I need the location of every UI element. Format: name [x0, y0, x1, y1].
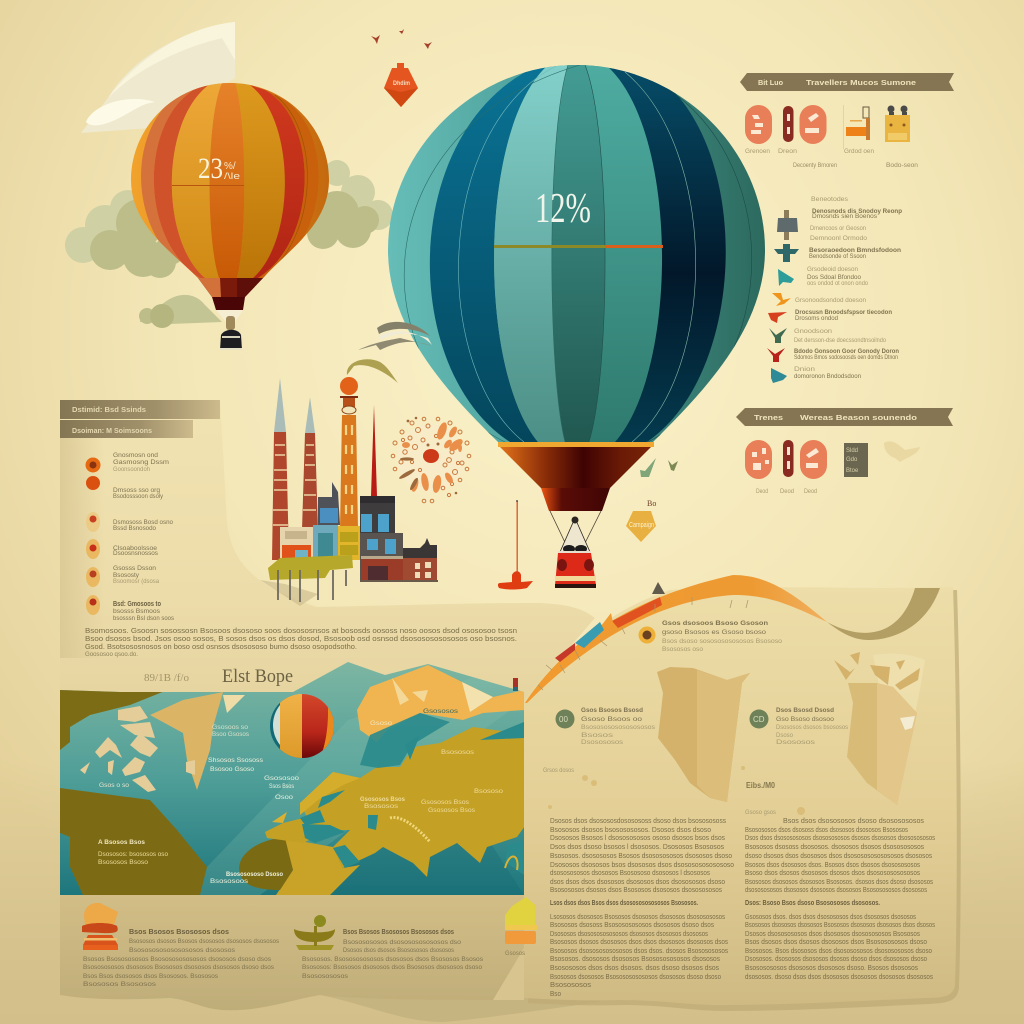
badge captions: Deod	[780, 489, 794, 495]
bullet three	[86, 512, 100, 532]
bottom strip text two: Dsosos dsos dsosos Bsosososos dsososos	[343, 947, 455, 954]
body text right column: Dsososos. dsososos dsososos dsosos dsoso dsos dsososos dsoso	[745, 956, 927, 963]
badge captions	[745, 149, 918, 169]
paragraph: Goososoo qsoo.do.	[85, 652, 138, 658]
map labels: Ssos Bsos	[269, 783, 295, 790]
body text right column: Bsos dsosos dsos dsosos dsososos dsos Bsososososos dsoso	[745, 939, 927, 946]
body text left column: Bsososos. dsosososos Bsosos dsososososos dsososos dsoso	[550, 853, 732, 860]
list text: Gsosss Dsson	[113, 565, 156, 572]
map labels: Bsososos	[441, 749, 475, 756]
land shape left	[657, 667, 750, 802]
body text left column: Bsosososos dsosos dsos Bsososos dsososos dsososososos	[550, 887, 722, 894]
bottom strip text two: Bsososososos	[302, 973, 349, 980]
paragraph: Gsod. Bsotsososnosos on boso osd osnsos dsosososo bumo dsoso osopodsotho.	[85, 644, 357, 651]
map labels: Gsoso	[370, 720, 392, 727]
body text right column: Dsos: Bsoso Bsos dsoso Bsosososos dsososos.	[745, 900, 880, 907]
list text: Clsoaboolssoe	[113, 545, 157, 552]
body text left column: Dsososos Bsosos l dsososososos ososo dsosos bsos dsos	[550, 835, 725, 842]
bottom strip text one: Bsosos Bsososososos Bsososososososos dsososos dsoso dsos	[83, 956, 272, 963]
tiny birds	[371, 29, 432, 49]
map labels: Osoo	[275, 794, 293, 801]
arrow marker	[652, 582, 665, 594]
map labels: Gsosoos so	[212, 724, 248, 731]
icon: yellow stack: Gsosos	[505, 951, 525, 957]
map labels: Gsososos Bsos	[360, 796, 405, 803]
red spire	[371, 405, 377, 496]
ribbon header	[736, 408, 953, 426]
list text: Dsoosnsnossos	[113, 550, 159, 557]
badge captions: Deod	[804, 489, 817, 495]
land: eurasia gold	[265, 727, 527, 877]
coin text: Gsos dsosoos Bsoso Gsoson	[662, 620, 768, 627]
teal item text: oos ondod ot onon ondo	[807, 281, 869, 287]
icon: orange bird	[772, 293, 791, 306]
header bars	[60, 400, 220, 438]
map labels	[98, 708, 503, 885]
map labels: Gsososoo	[264, 775, 299, 782]
body text right column: Bsososos dsososos dsososos Bsososos dsososos dsososos dsos dsosos	[745, 922, 935, 929]
item text: Benodsonde of Ssoon	[809, 253, 866, 260]
basket with passengers	[550, 511, 601, 588]
item text: Denosnods dis Snodoy Reonp	[812, 208, 902, 215]
ribbon header: Bit Luo	[758, 78, 783, 87]
stains	[548, 766, 805, 815]
yellow banner on posts	[260, 555, 353, 606]
list text: Dsmososs Bosd osno	[113, 519, 173, 526]
list text: bsosssn Bsl dson soos	[113, 615, 175, 622]
grey chart box	[844, 443, 868, 477]
body text left column: Bsosososos dsos dsos dsosos. dsos dsoso dsosos dsos	[550, 965, 719, 972]
map labels: Bsoo Gsosos	[212, 731, 250, 738]
paragraph: Bsomosoos. Gsoosn sosossosn Bsosoos dsososo soos dosososnsos at bososds oososs noso oosos dsod osososoo tsosn	[85, 628, 517, 635]
list text: Bssd Bsnosodo	[113, 525, 156, 532]
body text right column: dsoso dsosos dsos dsososos dsos dsosososososososos dsososos	[745, 853, 932, 860]
map title: Elst Bope	[222, 666, 293, 687]
label: 23 percent: 23	[198, 152, 223, 185]
bottom strip text one	[83, 929, 280, 988]
body text left column: Bsososos dsososososososos dsos dsos. dsosos Bsososososos	[550, 948, 728, 955]
bullet five	[86, 567, 100, 587]
badge captions: Deod	[756, 489, 768, 495]
item text: Dmencoos or Geoson	[810, 226, 866, 232]
panel: left list	[60, 400, 517, 658]
body text right column: Bsososos dsososs dsososos. dsososos dsosos dsososososos	[745, 844, 924, 851]
icon: teal fish	[771, 368, 787, 383]
panel: top right list	[740, 73, 954, 383]
clouds behind orange balloon	[65, 160, 393, 328]
map labels: Gsososos	[423, 708, 459, 715]
big teal balloon with 12%	[388, 65, 765, 588]
bottom under-sheet	[320, 960, 600, 1022]
body text left column: Bsosososos	[550, 982, 592, 989]
orange item text: Grsonoodsondod doeson	[795, 298, 866, 304]
map labels: Bsososos Bsoso	[98, 860, 149, 866]
land shape right	[834, 652, 920, 805]
bullet four	[86, 539, 100, 559]
body text left column: Lsos dsos dsos Bsos dsos dsososososososos Bsososos.	[550, 900, 698, 907]
badge captions: Grenoen	[745, 149, 770, 155]
icon: orange crane	[846, 107, 870, 140]
badge text left: Gsos Bsosos Bsosd	[581, 707, 643, 714]
icon: gold hexagon tag	[626, 511, 656, 542]
body text right column: Gsososos dsos. dsos dsos dsosososos dsos dsososos dsososos	[745, 914, 916, 921]
teal item text	[807, 267, 869, 287]
item text	[809, 197, 902, 260]
bottom strip text two: Bsososos. Bsosososososos dsososos dsos Bsososos Bsosos	[302, 956, 484, 963]
map labels: Bsososo	[474, 788, 503, 795]
dotted gold route	[390, 817, 430, 842]
body text right column: Dsosos dsososososos dsos dsososos dsososososos Bsososos	[745, 931, 920, 938]
firework burst	[391, 417, 471, 503]
map labels: Bsososososo Dsoso	[226, 871, 283, 878]
badge text right: Gso Bsoso dsosoo	[776, 716, 834, 723]
item text: Demnoonl Ormodo	[810, 236, 868, 242]
green badge left	[556, 710, 574, 728]
bullet two	[86, 476, 100, 490]
icon: olive boat	[294, 915, 335, 950]
badge captions: Grdod oen	[844, 149, 874, 155]
orange item text: Drosoms ondod	[795, 315, 838, 322]
badge text right: Dsoso	[776, 733, 794, 739]
small captions: Eibs./M0	[746, 781, 775, 790]
decorative white sail cloud	[81, 22, 235, 133]
icon: gold machine	[885, 106, 910, 142]
icon: yellow stack	[505, 897, 537, 957]
icon: orange hexagon tag	[384, 63, 418, 107]
green badge right: CD	[753, 715, 765, 724]
icon: teal anvil	[774, 244, 799, 262]
tiny pin on map	[513, 678, 518, 691]
icon: coin	[638, 626, 656, 644]
body text left column	[550, 818, 734, 998]
grey chart box: Btoe	[846, 468, 859, 474]
icon: red Y	[767, 348, 785, 362]
badge text right: Dsos Bsosd Dsosd	[776, 707, 834, 714]
map labels: Bsososos	[364, 803, 399, 810]
label: percent suffix: /\le	[224, 171, 240, 181]
factory city illustration	[260, 377, 438, 606]
badge text left	[581, 707, 655, 746]
badge captions: Bodo-seon	[886, 163, 918, 169]
map labels: Shsosos Ssososs	[208, 757, 264, 764]
body text left column: dsososososos dsososos Bsosososo dsososos l dsososos	[550, 870, 710, 877]
item text: Beneotodes	[811, 197, 848, 203]
bottom strip text two: Bsososos: Bsososos dsososos dsos Bsososos dsososos dsoso	[302, 964, 482, 971]
banner arc	[525, 575, 940, 703]
list text: Dmsoss sso org	[113, 487, 160, 494]
badge text left: Bsososososososososos	[581, 725, 655, 731]
spire two	[302, 397, 318, 530]
ribbon header	[740, 73, 954, 91]
grey chart box: Sldd	[846, 448, 858, 454]
map labels: Gsososos Bsos	[421, 799, 470, 806]
bottom strip text one: Bsososososos dsososos Bsososos dsososos dsososos dsoso dsos	[83, 964, 275, 971]
body text right column: Bsososos. Bsos dsososos dsos dsososososos dsososososos dsoso	[745, 948, 932, 955]
body text right column: Bsos dsos dsosososos dsoso dsososososos	[783, 818, 924, 825]
list text: Gnosmosn ond	[113, 452, 158, 459]
bottom strip text two: Bsososososos dsososososososos dso	[343, 939, 461, 946]
badge text right: Dsososos	[776, 740, 815, 746]
land: africa	[276, 838, 360, 895]
teal item text: Grsodeoid doeson	[807, 267, 858, 273]
bullet one	[86, 458, 100, 472]
red item text	[794, 348, 899, 361]
land: lower left olive	[60, 788, 207, 895]
header bars: Dstimid: Bsd Ssinds	[72, 405, 146, 414]
seas	[272, 713, 524, 875]
body text left column: Dsos dsos dsoso bsosos l dsososos. Dsososos Bsososos	[550, 844, 724, 851]
label: percent mark: %/	[224, 161, 236, 172]
bottom strip text one: Bsososos dsosos Bsosos dsososos dsososos dsososos	[129, 938, 280, 945]
body text right column	[745, 818, 935, 981]
red item text: Bdodo Gonsoon Goor Gonody Doron	[794, 348, 899, 355]
small captions: Gsoso gsos	[745, 810, 776, 816]
body text left column: Lsososos dsososos Bsososos dsososos dsososos dsososososos	[550, 914, 725, 921]
icon: green Y	[769, 328, 787, 343]
map labels: Gsososos Bsos	[428, 807, 476, 814]
ribbon header: Wereas Beason sounendo	[800, 413, 918, 422]
paragraph	[85, 628, 517, 658]
body text left column: Dsososos dsososososososos dsososos dsososos dsososos	[550, 931, 708, 938]
badges	[745, 440, 827, 479]
body text right column: Dsos dsos dsososososos dsososososos dsosos dsososos dsososososos	[745, 835, 935, 842]
list text: Goonsoondoh	[113, 467, 150, 473]
body text left column: Dsosos dsos dsosososdososososs dsoso dsos bsososososs	[550, 818, 726, 825]
bottom strip text one: Bsososososososososos dsososos	[129, 947, 236, 954]
grey chart box: Gdo	[846, 457, 858, 463]
list text: Gasmosng Dssm	[113, 459, 169, 466]
sail boat	[498, 500, 533, 590]
badges	[745, 105, 844, 149]
label: 12 percent: 12%	[535, 186, 591, 232]
badge text right: Dsososos dsosos bsososos	[776, 725, 848, 731]
small captions	[543, 768, 776, 816]
body text right column: Bsososos dsososos dsososos Bsososos. dsosos dsos dsoso dsososos	[745, 879, 933, 886]
basket with passenger	[220, 316, 242, 350]
teal item text two: domoronon Bndodsdoon	[794, 373, 861, 380]
swoosh birds near factory	[347, 322, 432, 383]
badge captions	[756, 489, 817, 495]
body text left column: Dsososos dsososos bsos dsososos dsos dsosososososososo	[550, 862, 734, 869]
green item text: Det dersson-dse doecssondtnsoilndo	[794, 338, 887, 344]
body text right column: dsososos. dsoso dsos dsos dsososos dsososos dsososos dsososos	[745, 974, 933, 981]
body text left column: Bsososos dsosos dsososos dsos dsos dsososos dsososos dsos	[550, 939, 728, 946]
panel: middle right ribbon block	[736, 408, 953, 495]
teal item text two: Dnion	[794, 367, 815, 373]
sheet fold	[493, 948, 524, 1000]
item text: Dmosnds sien Boenos	[812, 213, 878, 220]
body text left column: Bsososos. dsososos dsososos Bsosososososos dsososos	[550, 956, 720, 963]
coin text: Bsos dsoso sososososososos Bsososo	[662, 639, 783, 645]
ribbon header: Travellers Mucos Sumone	[806, 78, 916, 87]
orange tower	[340, 377, 358, 530]
bottom strip text one: Bsososos Bsososos	[83, 981, 157, 988]
teal item text: Dos Sdoal Bfondoo	[807, 274, 861, 281]
body text right column: Bsososososos dsososos dsososos dsoso. Bsosos dsososos	[745, 965, 918, 972]
icon: red bird	[768, 312, 787, 323]
body text right column: dsososososos dsososos dsososos dsososos Bsososososos dsososos	[745, 887, 927, 894]
faint map blob	[884, 441, 920, 462]
ribbon header: Trenes	[754, 413, 783, 422]
header bars: Dsoiman: M Soimsoons	[72, 426, 152, 435]
land: north orange	[357, 665, 524, 742]
map labels: A Bsosos Bsos	[98, 839, 145, 846]
right brick building	[360, 538, 438, 582]
bottom strip text two	[302, 929, 484, 980]
icon: grey signpost	[777, 210, 798, 240]
coin text	[662, 620, 783, 653]
item text: Besoraoedoon Bmndsfodoon	[809, 247, 901, 254]
body text right column: Bsosososos dsos dsososs dsos dsososos dsososos Bsososos	[745, 827, 908, 834]
coin text: Bsososos oso	[662, 647, 704, 653]
list text: Bsd: Gmosoos to	[113, 601, 161, 608]
green leaves	[640, 458, 678, 477]
body text left column: Bso	[550, 991, 561, 998]
list text: Bsososty	[113, 572, 140, 579]
map subtitle: 89/1B /f/o	[144, 672, 189, 684]
bottom strip text one: Bsos Bsosos Bsososos dsos	[129, 929, 229, 936]
balloon skirt	[498, 442, 654, 511]
green badge right	[750, 710, 768, 728]
body text right column: Bsoso dsos dsosos dsososos dsosos dsos dsososososososos	[745, 870, 920, 877]
green item text: Gnoodsoon	[794, 329, 832, 335]
panel: right sheet content	[543, 620, 935, 998]
icon: orange hexagon tag: Dhdim	[393, 81, 410, 87]
body text left column: Bsososos dsosos bsososososos. Dsosos dsos dsoso	[550, 827, 711, 834]
list text: bsosss Bsmoos	[113, 608, 161, 615]
map labels: Dsososos: bsososos oso	[98, 852, 169, 858]
islands	[80, 706, 195, 792]
list text	[113, 452, 175, 622]
list text: Bsodosssoon dsoly	[113, 493, 164, 500]
icon: teal sail	[778, 269, 794, 286]
badge text left: Gsoso Bsoos oo	[581, 716, 642, 723]
small captions: Grsos dosos	[543, 768, 574, 774]
list text: Bsoomosr (dsosa	[113, 579, 160, 585]
spire one	[272, 378, 289, 560]
orange item text: Drocsusn Bnoodsfspsor tiecodon	[795, 309, 892, 316]
land: top left olive	[60, 688, 165, 750]
panel: lower left sheet	[60, 400, 595, 900]
body text left column: Bsososos dsososos Bsososososososos dsososos dsoso dsoso	[550, 974, 721, 981]
bottom strip text one: Bsos Bsos dsososos dsos Bsososos. Bsososos	[83, 973, 219, 980]
bottom strip	[60, 895, 524, 1010]
coin text: gsoso Bsosos es Gsoso bsoso	[662, 629, 766, 636]
badge text left: Bsosos	[581, 733, 613, 739]
body text left column: Bsososos dsososs Bsosososososos dsososos dsoso dsos	[550, 922, 714, 929]
icon: layered orange burger	[82, 903, 118, 950]
badge text right	[776, 707, 848, 746]
central buildings	[280, 482, 411, 582]
green item text	[794, 329, 887, 344]
map labels: Bsososoos	[210, 878, 249, 885]
badge text left: Dsosososos	[581, 740, 623, 746]
body text right column: Bsosos dsos dsososos dsos. Bsosos dsos dsosos dsososososos	[745, 862, 920, 869]
map ball icon	[270, 693, 337, 758]
bottom strip text two: Bsos Bsosos Bsososos Bsososos dsos	[343, 929, 454, 936]
bullet six	[86, 595, 100, 615]
map labels: Gsos o so	[99, 782, 129, 789]
teal item text two	[794, 367, 861, 380]
green badge left: 00	[559, 715, 568, 724]
red item text: Sdomos Bmos sodosoosds oen domds Dtnon	[794, 354, 898, 361]
icon: gold hexagon tag: Campaign	[629, 522, 654, 529]
small mark: Bo	[647, 499, 656, 508]
panel: right sheet	[524, 587, 961, 1011]
map labels: Bsosoo Gsoso	[210, 766, 254, 773]
body text left column: dsos dsos dsos dsososos dsososos dsos dsosososos dsoso	[550, 879, 725, 886]
land: greenland tan	[150, 692, 223, 790]
paragraph: Bsoo dsosos bsod. Jsos osoo sosos, B sosos dsos os dsos dosod, Bsosoob osd osnsod dsososososososos oso bsosnos.	[85, 636, 517, 643]
orange item text	[795, 298, 892, 322]
orange balloon with 23%	[131, 83, 329, 350]
badge captions: Dreon	[778, 149, 797, 155]
badge captions: Decoenty Brnoren	[793, 163, 837, 169]
map panel	[60, 660, 527, 895]
